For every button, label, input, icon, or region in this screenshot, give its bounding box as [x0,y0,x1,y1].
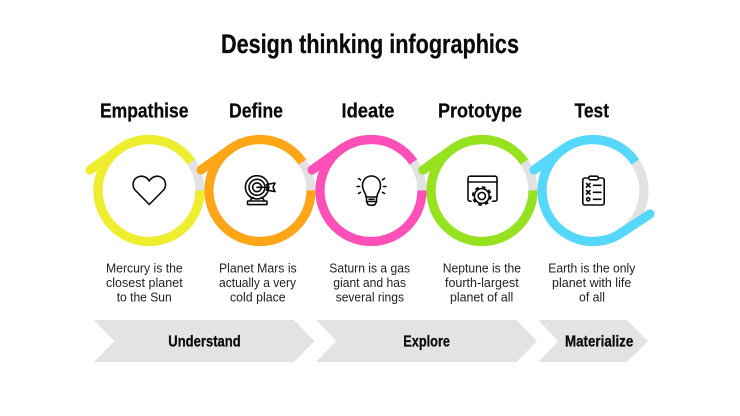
ring: green [423,139,533,242]
heading: Test: Test [574,100,609,122]
description: Neptune: planet of all [450,290,513,304]
description: Mercury: to the Sun [117,290,172,304]
description: Neptune [443,261,521,304]
description: Neptune: Neptune is the [443,261,521,275]
description: Saturn [329,261,410,304]
description: Mars: Planet Mars is [219,261,297,275]
description: Mars: cold place [230,290,286,304]
ring: yellow [90,139,200,242]
heading: Ideate: Ideate [342,100,394,122]
description: Mars: actually a very [219,276,297,290]
step: Ideate [312,100,422,304]
step: Test [534,100,650,304]
description: Mercury [106,261,183,304]
arrow: Understand: Understand [168,334,241,351]
title: Design thinking infographics [221,29,519,59]
heading: Empathise: Empathise [100,100,188,122]
ring: orange [201,139,311,242]
icon: target [245,176,275,205]
arrow: Materialize [538,320,648,362]
step: Prototype [423,100,533,304]
description: Earth: of all [579,290,605,304]
arrow: Explore: Explore [403,334,450,351]
ring: pink [312,139,422,242]
description: Mars [219,261,297,304]
description: Earth: Earth is the only [548,261,636,275]
heading: Define: Define [229,100,283,122]
arrow: Materialize: Materialize [565,334,634,351]
icon: light bulb [357,176,386,205]
description: Mercury: Mercury is the [106,261,183,275]
description: Saturn: several rings [336,290,404,304]
description: Earth: planet with life [552,276,631,290]
step: Empathise [90,100,200,304]
arrow: Understand [94,320,314,362]
icon: clipboard checklist [583,176,604,205]
description: Earth [548,261,636,304]
step: Define [201,100,311,304]
arrow: Explore [316,320,537,362]
ring: blue [534,140,650,242]
description: Mercury: closest planet [106,276,183,290]
icon: window with gear [468,176,497,206]
heading: Prototype: Prototype [438,100,522,122]
description: Saturn: Saturn is a gas [329,261,410,275]
description: Saturn: giant and has [333,276,406,290]
description: Neptune: fourth-largest [445,276,519,290]
icon: heart [133,176,166,204]
